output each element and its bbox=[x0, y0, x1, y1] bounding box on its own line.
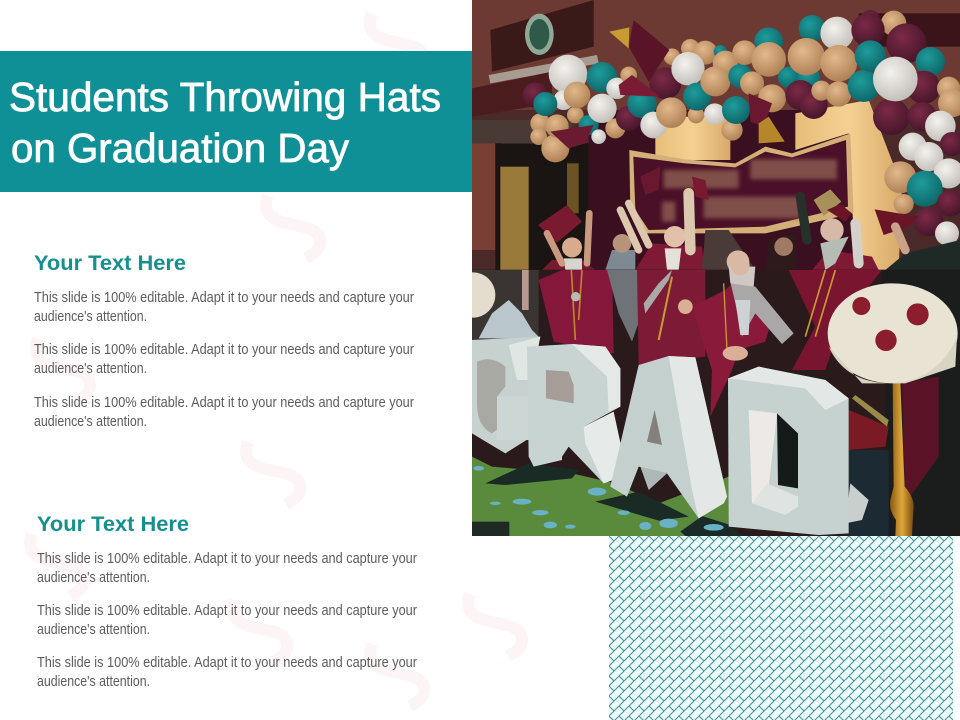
lower photo section bbox=[450, 257, 960, 536]
doorway and tinsel bbox=[495, 143, 589, 270]
GRAD letters bbox=[472, 337, 849, 535]
letter D bbox=[728, 367, 849, 535]
paragraph 2 bbox=[34, 342, 414, 377]
grass and confetti bbox=[472, 457, 742, 536]
paragraph 6: audience's attention. bbox=[37, 674, 150, 690]
photo: graduation scene bbox=[472, 0, 960, 536]
paragraph 5: This slide is 100% editable. Adapt it to your needs and capture your bbox=[37, 603, 417, 619]
right side dark crowd bbox=[845, 270, 960, 536]
title: on Graduation Day bbox=[11, 125, 349, 171]
heading: lower: Your Text Here bbox=[37, 513, 189, 536]
paragraph 4: audience's attention. bbox=[37, 570, 150, 586]
paragraph 1: audience's attention. bbox=[34, 309, 147, 325]
banner bbox=[629, 133, 854, 233]
paragraph 5: audience's attention. bbox=[37, 622, 150, 638]
paragraph 3 bbox=[34, 395, 414, 430]
small statue bbox=[479, 300, 540, 338]
flower bouquet bbox=[828, 283, 958, 383]
flying caps bbox=[538, 20, 919, 243]
background watermark pattern bbox=[30, 14, 522, 706]
dark drape and curtains bbox=[589, 100, 902, 270]
paragraph 1: This slide is 100% editable. Adapt it to your needs and capture your bbox=[34, 290, 414, 306]
balloon arch bbox=[523, 10, 960, 245]
crowd backdrop bbox=[472, 270, 960, 536]
graduates robes bbox=[539, 257, 882, 417]
paragraph 2: audience's attention. bbox=[34, 361, 147, 377]
paragraph 5 bbox=[37, 603, 417, 638]
paragraph 4 bbox=[37, 551, 417, 586]
title bbox=[9, 74, 441, 171]
text block: upper bbox=[34, 252, 414, 430]
letter A bbox=[610, 356, 727, 518]
paragraph 4: This slide is 100% editable. Adapt it to your needs and capture your bbox=[37, 551, 417, 567]
graduates upper bodies bbox=[542, 193, 960, 273]
heading: upper: Your Text Here bbox=[34, 252, 186, 275]
sign bbox=[472, 0, 599, 117]
letter G bbox=[472, 337, 540, 453]
paragraph 6: This slide is 100% editable. Adapt it to your needs and capture your bbox=[37, 655, 417, 671]
paragraph 3: This slide is 100% editable. Adapt it to your needs and capture your bbox=[34, 395, 414, 411]
title banner bbox=[0, 51, 472, 192]
brick wall bbox=[472, 0, 960, 536]
letter R bbox=[527, 344, 623, 483]
paragraph 6 bbox=[37, 655, 417, 690]
title: Students Throwing Hats bbox=[9, 74, 441, 120]
hatched pattern panel bbox=[609, 536, 953, 720]
left white flowers bbox=[450, 272, 495, 318]
paragraph 1 bbox=[34, 290, 414, 325]
text block: lower bbox=[37, 513, 417, 690]
paragraph 2: This slide is 100% editable. Adapt it to your needs and capture your bbox=[34, 342, 414, 358]
gold flower stand bbox=[890, 382, 914, 536]
paragraph 3: audience's attention. bbox=[34, 414, 147, 430]
